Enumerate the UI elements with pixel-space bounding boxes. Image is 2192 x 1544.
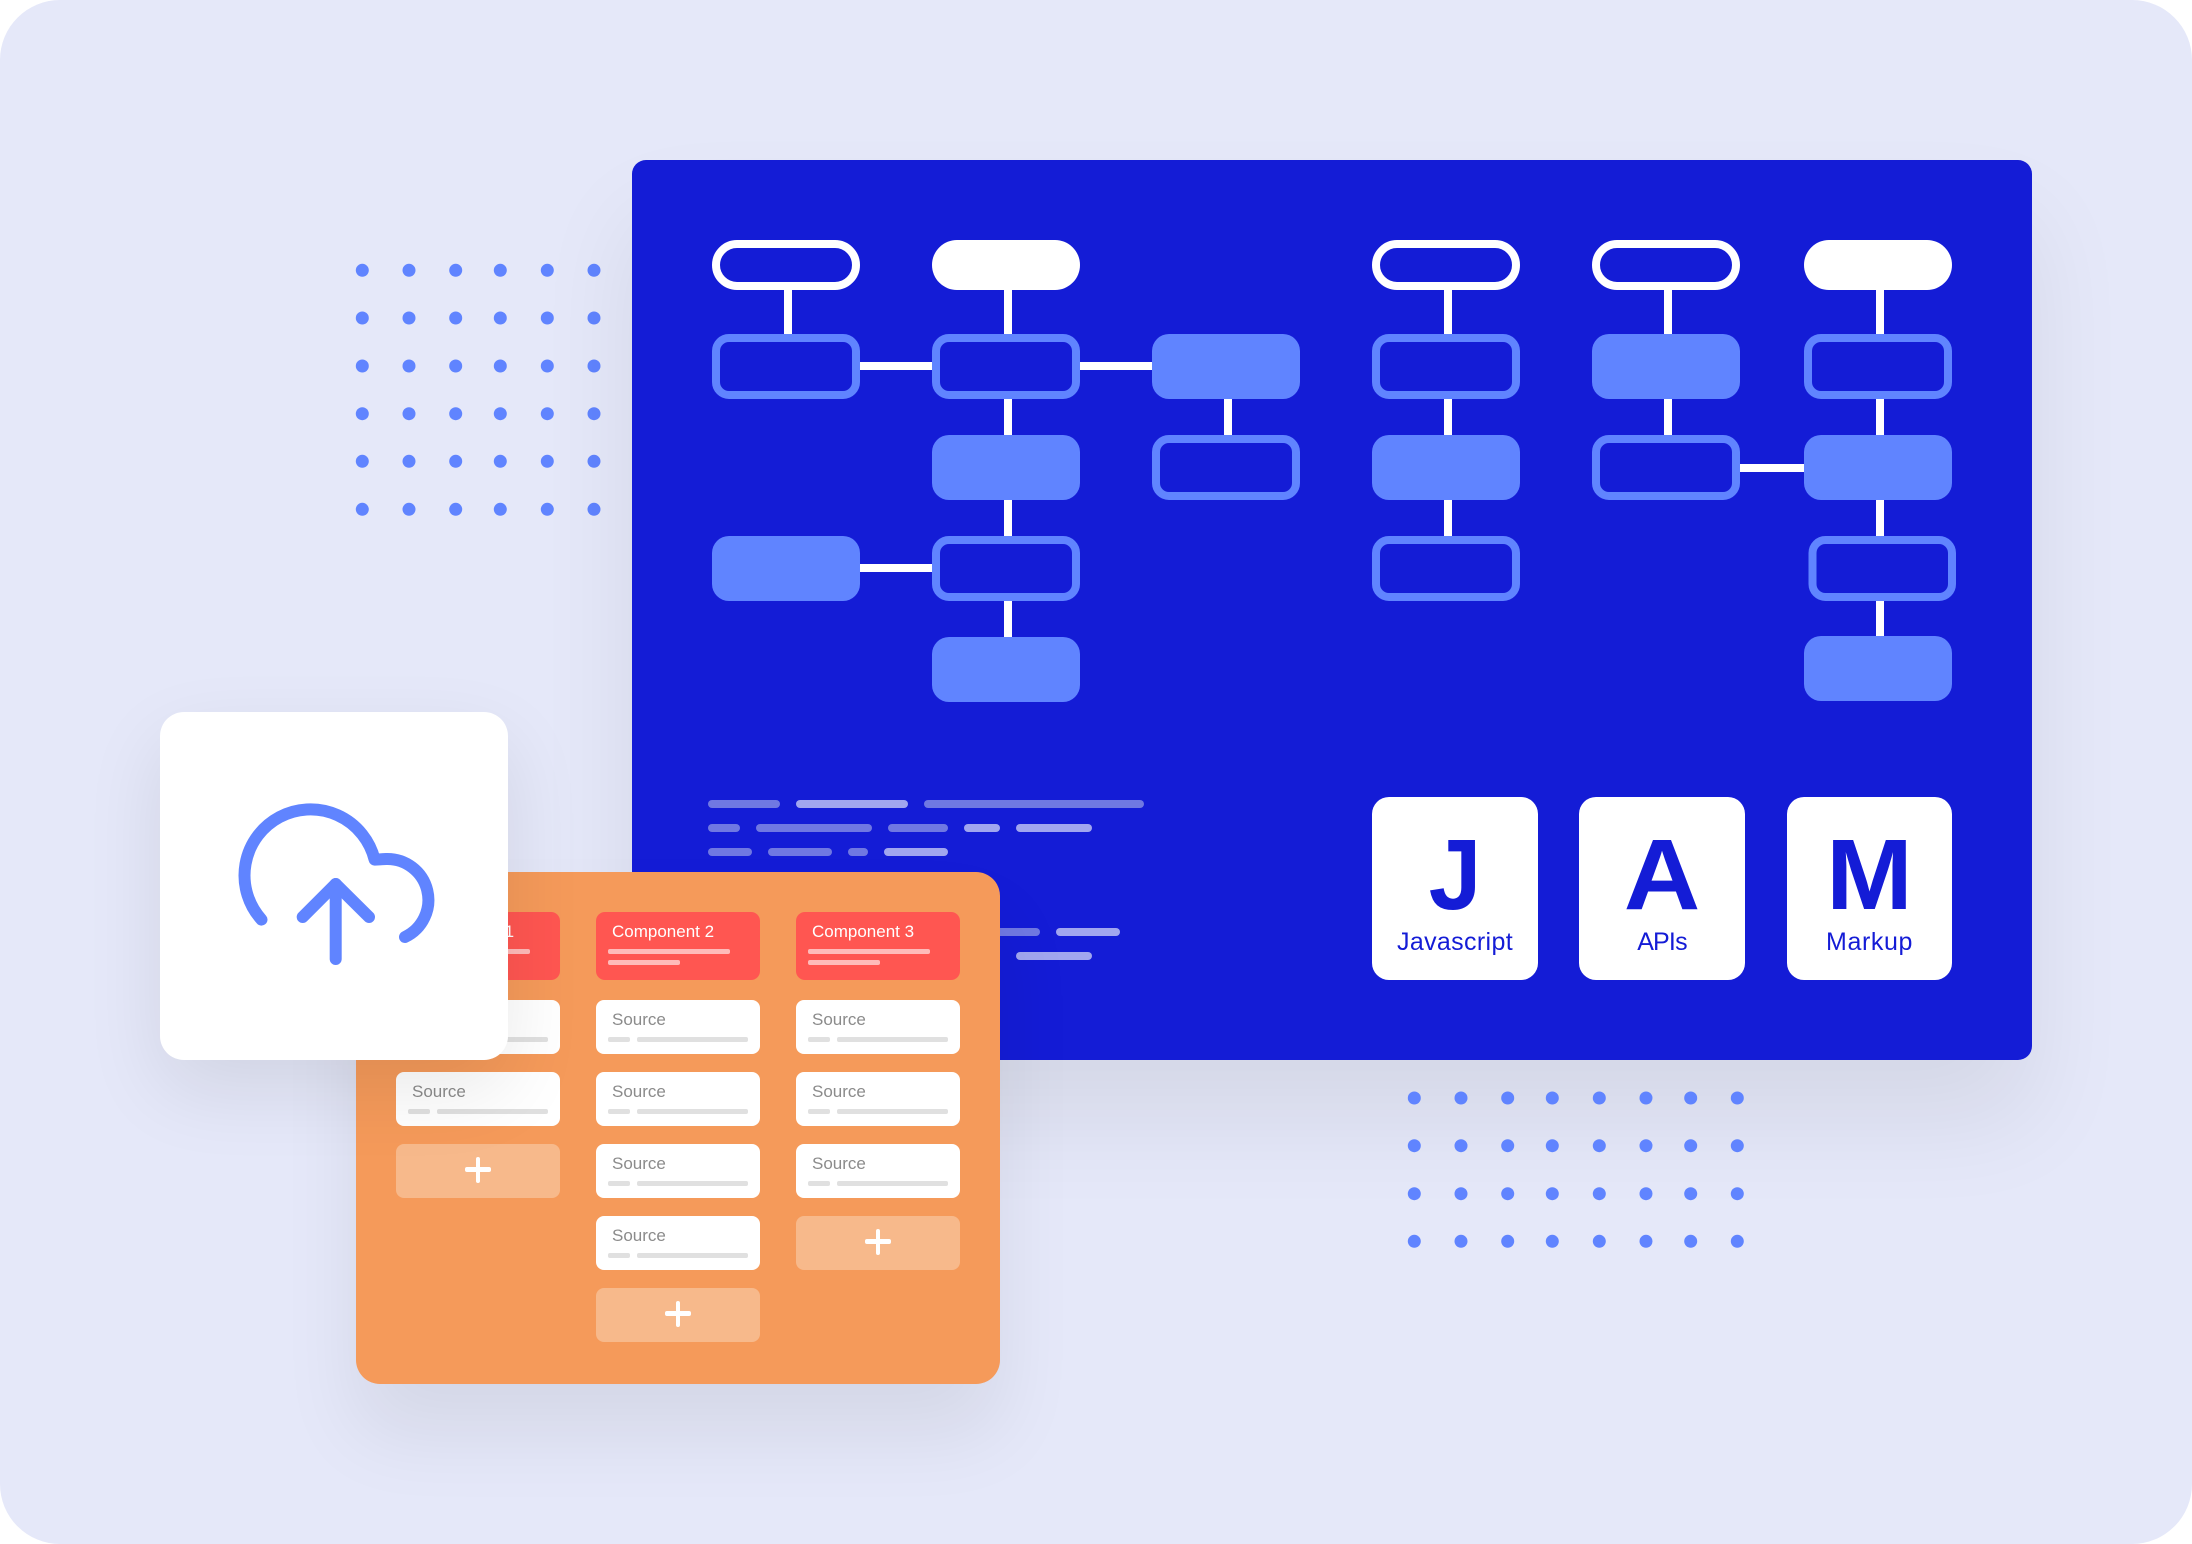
card: A APIs: A [1624,819,1700,931]
card: M Markup [1787,797,1952,980]
placeholder text lines [708,800,1144,960]
component 3 source: Source [812,1010,866,1029]
card: J Javascript: J [1429,819,1481,931]
card: M Markup: M [1826,819,1913,931]
component 3 source [796,1072,960,1126]
component 3 header: Component 3 [812,922,914,941]
component 2 header: Component 2 [612,922,714,941]
component 2 source [596,1144,760,1198]
component 2 source [596,1216,760,1270]
component 2 source [596,1000,760,1054]
flowchart column group 1 [712,240,1300,702]
panel: orange components board [356,872,1000,1384]
card: M Markup: Markup [1826,928,1913,956]
card: A APIs: APIs [1637,928,1687,956]
component 3 source [796,1000,960,1054]
card: A APIs [1579,797,1745,980]
flowchart diagram [712,240,1956,702]
component 3 source [796,1144,960,1198]
component 1 header: Component 1 [412,922,514,941]
component 2 source [596,1072,760,1126]
card: J Javascript: Javascript [1397,928,1513,956]
panel: upload card [160,712,508,1060]
component 3 source: Source [812,1154,866,1173]
card: J Javascript [1372,797,1538,980]
component 1 source: Source [412,1010,466,1029]
component 1 header [396,912,560,980]
component 2 source: Source [612,1010,666,1029]
component 3 header [796,912,960,980]
component 3 source: Source [812,1082,866,1101]
icon: cloud upload [238,803,434,965]
component 2 source: Source [612,1082,666,1101]
component 1 source [396,1072,560,1126]
connectors [784,290,1884,637]
component 1 source: Source [412,1082,466,1101]
dot grid: bottom right [1408,1092,1744,1248]
component 2 add button [596,1288,760,1342]
component 2 header [596,912,760,980]
component 2 source: Source [612,1154,666,1173]
component 1 add button [396,1144,560,1198]
component 1 source [396,1000,560,1054]
flowchart column group 2 [1372,240,1952,701]
panel: blue site diagram [632,160,2032,1060]
component 3 add button [796,1216,960,1270]
component 2 source: Source [612,1226,666,1245]
dot grid: top left [356,264,600,516]
